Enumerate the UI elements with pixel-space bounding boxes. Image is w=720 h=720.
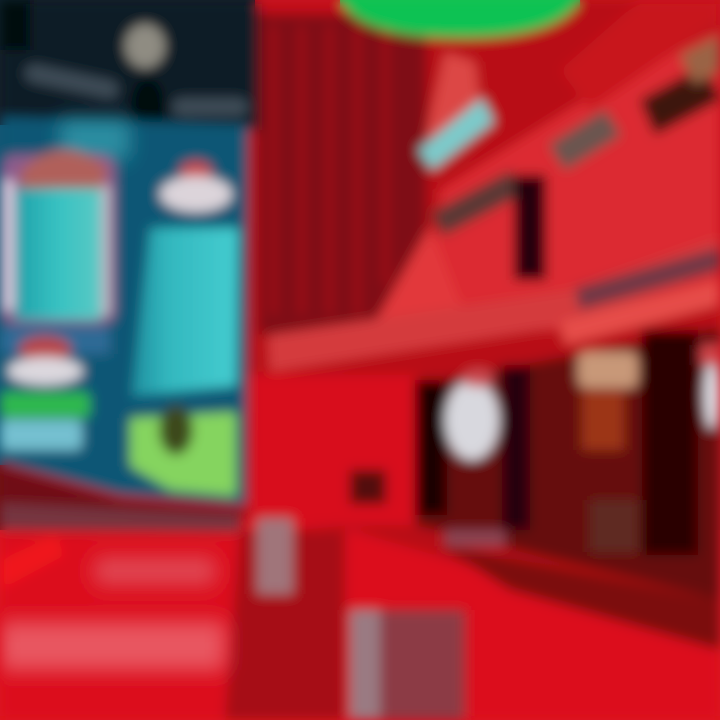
panel: teal wall display [0,117,248,505]
panel: red floor [0,465,720,720]
icon: cabinet screens [445,345,720,552]
sign: dark hanging signs [431,35,720,280]
panel: right teal machine [130,161,238,496]
icon: green ceiling light [340,0,580,38]
panel: dark red column [258,0,426,335]
panel: left teal machine [0,150,115,450]
floor reflection: grey posts [257,518,465,720]
floor reflection: light strips [0,535,225,670]
sign: red and teal pennant [418,52,494,170]
panel: bright red upper right wall [375,0,720,330]
panel: arcade cabinets row [350,327,720,600]
panel: lower red wall [250,375,420,525]
arrow: diagonal ceiling beams [268,237,720,372]
panel: dark ceiling left [0,0,262,138]
